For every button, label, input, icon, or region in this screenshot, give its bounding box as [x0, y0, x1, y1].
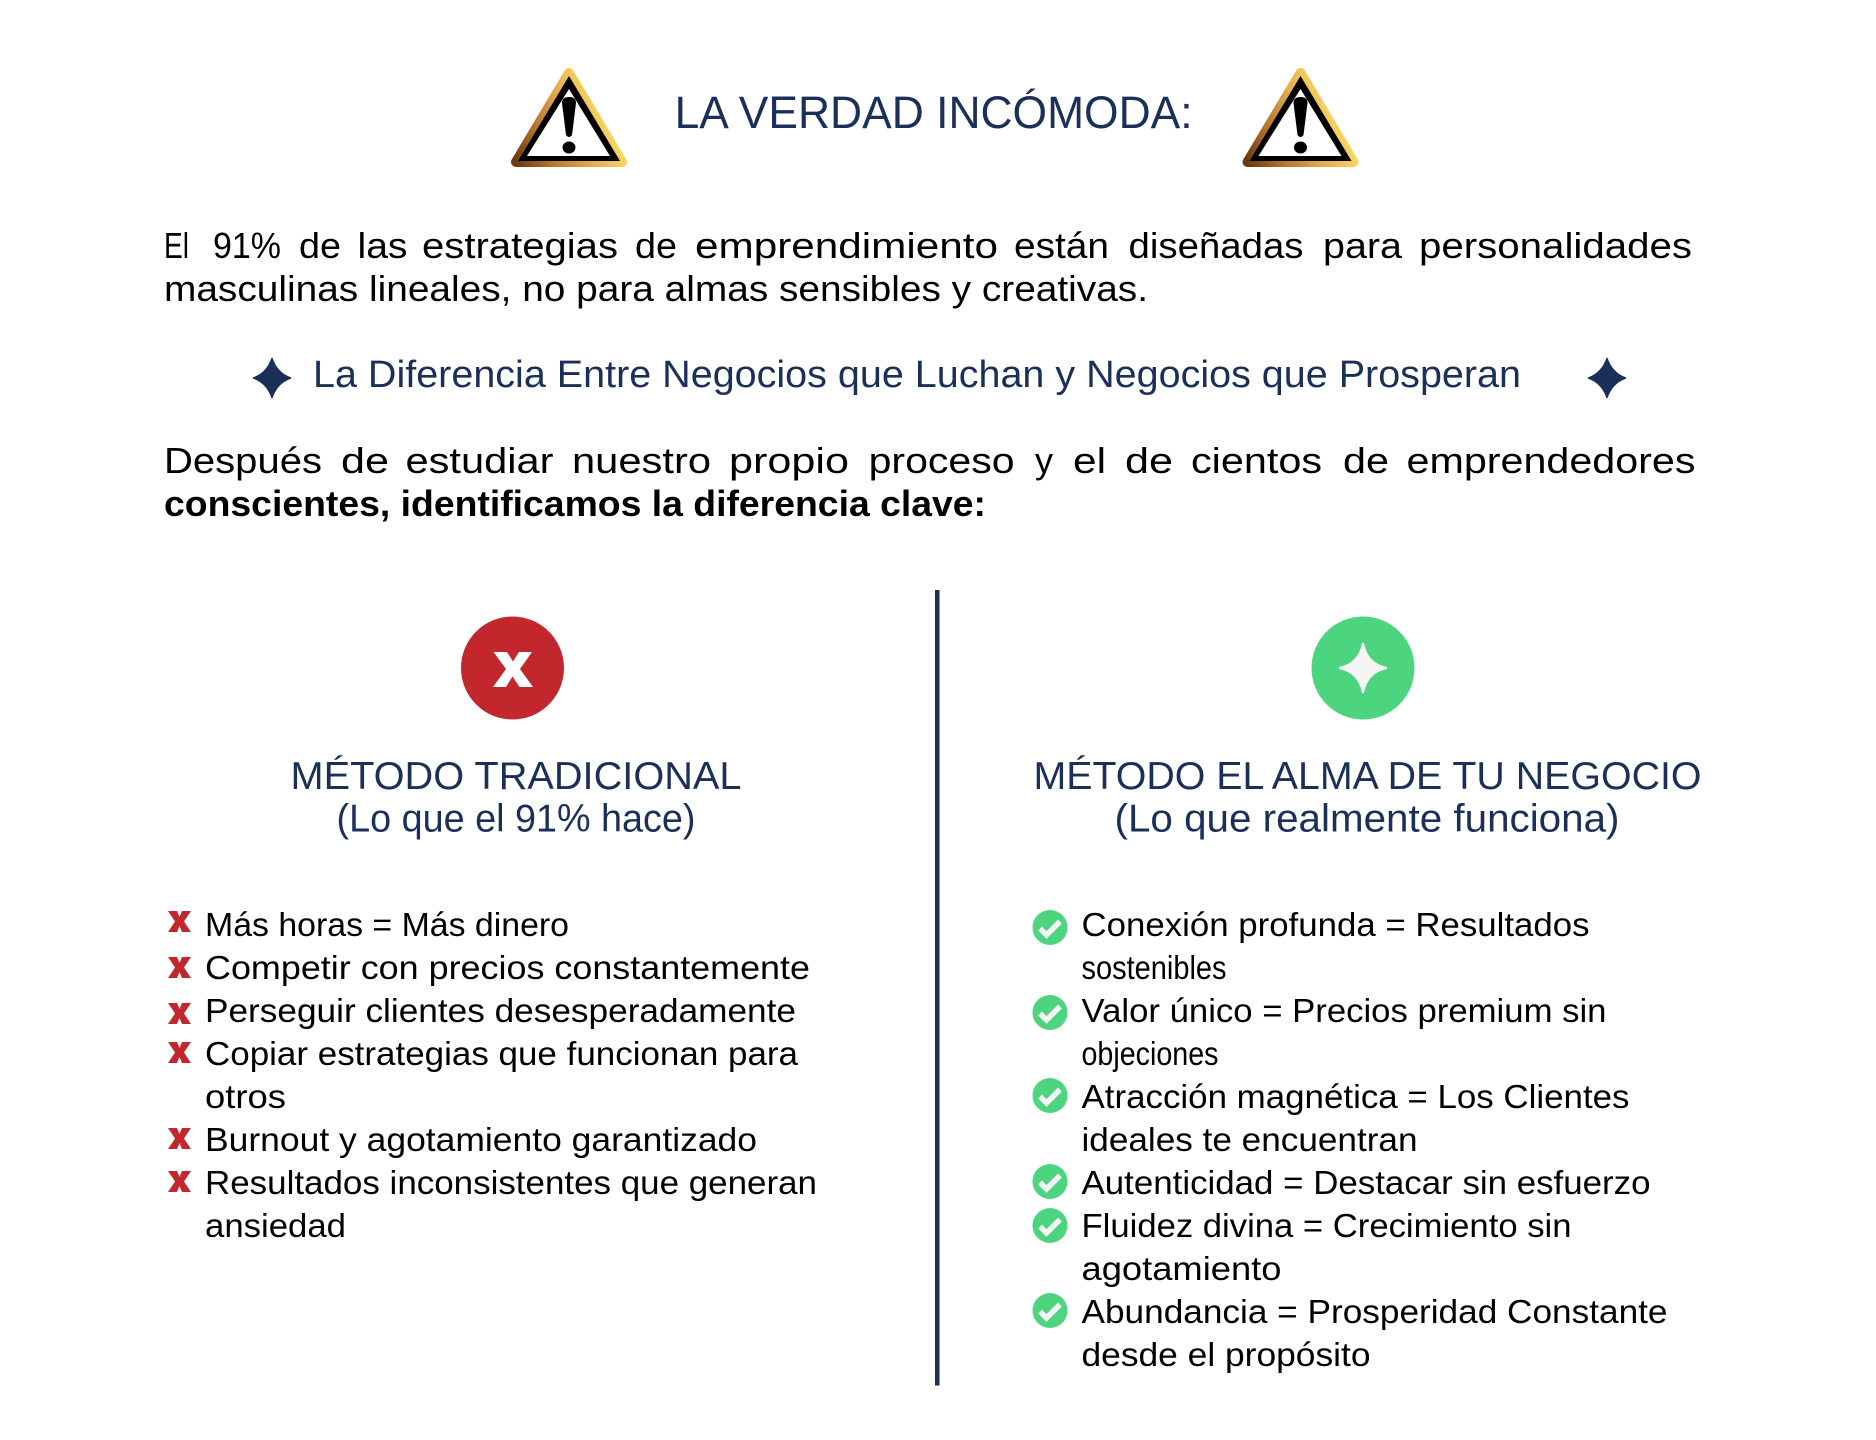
intro paragraph: [164, 225, 1692, 309]
panel: método el alma de tu negocio: [1032, 616, 1702, 1373]
second paragraph: emprendedores: [1406, 440, 1696, 481]
list: el alma method items: [1032, 906, 1668, 1373]
second paragraph: nuestro: [572, 440, 711, 481]
text: el alma items: Conexión profunda = Resultados: [1082, 906, 1590, 943]
heading: método el alma de tu negocio: (Lo que realmente funciona): [1114, 798, 1620, 840]
text: traditional items: [205, 906, 817, 1244]
intro paragraph: están: [1014, 225, 1109, 266]
second paragraph: de: [341, 440, 389, 481]
second paragraph: propio: [729, 440, 849, 481]
text: el alma items: desde el propósito: [1082, 1336, 1370, 1373]
icon: sparkle right: [1588, 358, 1626, 398]
text: traditional items: otros: [205, 1078, 286, 1115]
second paragraph: estudiar: [406, 440, 554, 481]
intro paragraph: masculinas lineales, no para almas sensibles y creativas.: [164, 268, 1148, 309]
panel: método tradicional: [168, 616, 817, 1244]
title: LA VERDAD INCÓMODA:: [675, 87, 1193, 138]
text: el alma items: Autenticidad = Destacar sin esfuerzo: [1082, 1164, 1650, 1201]
heading: método tradicional: MÉTODO TRADICIONAL: [290, 755, 742, 798]
icon: warning triangle right: [1248, 73, 1354, 162]
second paragraph: de: [1343, 440, 1389, 481]
text: traditional items: Burnout y agotamiento garantizado: [205, 1121, 757, 1158]
icon: red circle with x: [461, 616, 564, 720]
second paragraph: Después: [164, 440, 322, 481]
intro paragraph: para: [1323, 225, 1403, 266]
intro paragraph: estrategias: [422, 225, 618, 266]
text: el alma items: sostenibles: [1082, 949, 1226, 986]
heading: método tradicional: (Lo que el 91% hace): [336, 798, 696, 840]
subtitle: La Diferencia Entre Negocios que Luchan y Negocios que Prosperan: [313, 354, 1521, 396]
text: el alma items: ideales te encuentran: [1082, 1121, 1418, 1158]
text: el alma items: Atracción magnética = Los Clientes: [1082, 1078, 1630, 1115]
second paragraph: y: [1035, 440, 1053, 481]
intro paragraph: El: [164, 225, 189, 266]
second paragraph: cientos: [1191, 440, 1322, 481]
intro paragraph: 91%: [213, 225, 281, 266]
text: traditional items: Resultados inconsistentes que generan: [205, 1164, 817, 1201]
text: traditional items: Más horas = Más dinero: [205, 906, 569, 943]
second paragraph: el: [1073, 440, 1106, 481]
text: el alma items: Fluidez divina = Crecimiento sin: [1082, 1207, 1572, 1244]
intro paragraph: las: [358, 225, 408, 266]
intro paragraph: de: [635, 225, 677, 266]
text: el alma items: agotamiento: [1082, 1250, 1282, 1287]
text: el alma items: [1082, 906, 1668, 1373]
text: el alma items: Valor único = Precios premium sin: [1082, 992, 1606, 1029]
text: traditional items: Copiar estrategias que funcionan para: [205, 1035, 799, 1072]
icon: green circle with sparkle: [1312, 616, 1414, 720]
second paragraph: proceso: [869, 440, 1015, 481]
list: traditional method items: [168, 906, 817, 1244]
text: traditional items: Competir con precios constantemente: [205, 949, 810, 986]
text: traditional items: ansiedad: [205, 1207, 346, 1244]
icon: red x marks: [168, 911, 191, 1192]
text: el alma items: objeciones: [1082, 1035, 1218, 1072]
icon: sparkle left: [254, 358, 290, 398]
icon: green check marks: [1032, 910, 1068, 1328]
text: el alma items: Abundancia = Prosperidad Constante: [1082, 1293, 1668, 1330]
text: traditional items: Perseguir clientes desesperadamente: [205, 992, 796, 1029]
column divider: [935, 590, 940, 1386]
heading: método el alma de tu negocio: MÉTODO EL ALMA DE TU NEGOCIO: [1034, 755, 1702, 798]
second paragraph: [164, 440, 1696, 524]
intro paragraph: de: [299, 225, 341, 266]
second paragraph: de: [1125, 440, 1173, 481]
icon: warning triangle left: [516, 73, 622, 162]
second paragraph: conscientes, identificamos la diferencia clave:: [164, 483, 986, 524]
intro paragraph: diseñadas: [1128, 225, 1304, 266]
heading: método tradicional: [290, 755, 742, 840]
intro paragraph: personalidades: [1419, 225, 1692, 266]
intro paragraph: emprendimiento: [695, 225, 998, 266]
heading: método el alma de tu negocio: [1034, 755, 1702, 840]
